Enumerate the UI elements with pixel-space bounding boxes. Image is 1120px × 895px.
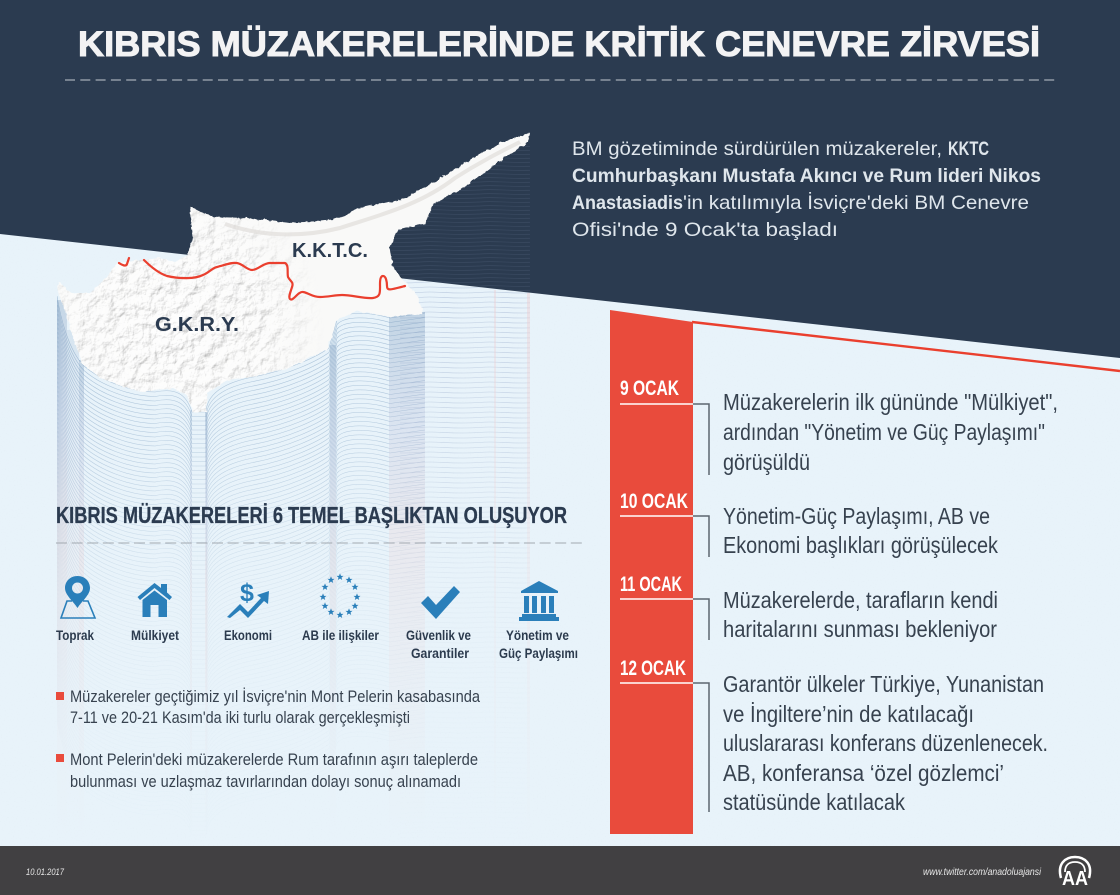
label: Guvenlik ve Garantiler: [406, 627, 471, 661]
icon: AA logo: [1060, 857, 1090, 890]
icon: Yonetim government building: [519, 581, 559, 621]
10 Ocak entry: 10 OCAK: [620, 490, 688, 513]
intro text block: Ofisi'nde 9 Ocak'ta başladı: [572, 219, 838, 241]
green line border: [119, 258, 405, 300]
icon: Guvenlik check mark: [421, 586, 460, 619]
bullet marker 1: [56, 692, 64, 700]
icon: Ekonomi dollar and arrow: $: [240, 579, 254, 607]
red slanted rule: [692, 322, 1120, 371]
bullet notes: bulunması ve uzlaşmaz tavırlarından dolayı sonuç alınamadı: [70, 772, 461, 791]
11 Ocak entry: [620, 573, 998, 642]
dark wave texture under Karpas: [390, 140, 530, 295]
label: Yonetim ve Guc Paylasimi: [499, 627, 578, 661]
section dashed rule: [56, 542, 585, 544]
title: KIBRIS MÜZAKERELERİNDE KRİTİK CENEVRE ZİRVESİ: [78, 25, 1040, 64]
bullet notes: Müzakereler geçtiğimiz yıl İsviçre'nin Mont Pelerin kasabasında: [70, 687, 480, 706]
footer url: www.twitter.com/anadoluajansi: [923, 867, 1042, 878]
12 Ocak entry: Garantör ülkeler Türkiye, Yunanistan: [723, 671, 1044, 697]
label: Mülkiyet: Mülkiyet: [131, 627, 179, 643]
northern mountain ridge: [225, 142, 520, 234]
label: KKTC: K.K.T.C.: [292, 240, 368, 262]
red date bar: [610, 310, 693, 834]
icon: Toprak map pin: [61, 576, 95, 618]
label: Guvenlik ve Garantiler: Garantiler: [411, 645, 469, 661]
wave line relief under the island: [57, 282, 530, 663]
title dashed rule: [65, 79, 1056, 81]
intro text block: Cumhurbaşkanı Mustafa Akıncı ve Rum lideri Nikos: [572, 165, 1041, 187]
label: Yonetim ve Guc Paylasimi: Yönetim ve: [506, 627, 569, 643]
map of Cyprus: [57, 133, 529, 412]
island landmass: [57, 133, 529, 412]
12 Ocak entry: AB, konferansa ‘özel gözlemci’: [723, 760, 1004, 786]
10 Ocak entry: [620, 490, 998, 558]
intro text block: [572, 138, 1041, 241]
footer: [0, 846, 1120, 895]
12 Ocak entry: 12 OCAK: [620, 657, 686, 680]
icon: Mülkiyet house: [138, 583, 172, 617]
dark slanted header panel: [0, 0, 1120, 358]
label: GKRY: G.K.R.Y.: [155, 314, 239, 336]
12 Ocak entry: [620, 657, 1048, 815]
footer date: 10.01.2017: [26, 867, 65, 878]
intro text block: 'in katılımıyla İsviçre'deki BM Cenevre: [683, 191, 1029, 214]
vertical colour strips: [57, 290, 530, 840]
9 Ocak entry: [620, 377, 1058, 475]
shaded relief: [58, 207, 308, 412]
label: Yonetim ve Guc Paylasimi: Güç Paylaşımı: [499, 645, 578, 661]
9 Ocak entry: 9 OCAK: [620, 377, 679, 400]
11 Ocak entry: Müzakerelerde, tarafların kendi: [723, 587, 998, 613]
bullet notes: 7-11 ve 20-21 Kasım'da iki turlu olarak gerçekleşmişti: [70, 708, 410, 727]
bullet marker 2: [56, 754, 64, 762]
bullet notes: [56, 687, 480, 791]
label: Ekonomi: Ekonomi: [224, 627, 272, 643]
9 Ocak entry: görüşüldü: [723, 449, 810, 475]
timeline panel: [610, 310, 1120, 834]
12 Ocak entry: statüsünde katılacak: [723, 789, 905, 815]
11 Ocak entry: 11 OCAK: [620, 573, 682, 596]
paper speckle: [0, 230, 1120, 850]
label: AB: AB ile ilişkiler: [302, 627, 379, 643]
section heading: KIBRIS MÜZAKERELERİ 6 TEMEL BAŞLIKTAN OLUŞUYOR: [56, 502, 567, 528]
icon: Ekonomi dollar and arrow: [227, 579, 269, 618]
intro text block: Anastasiadis: [572, 192, 683, 214]
icon: AA logo: AA: [1062, 868, 1088, 890]
9 Ocak entry: Müzakerelerin ilk gününde "Mülkiyet",: [723, 389, 1058, 415]
11 Ocak entry: haritalarını sunması bekleniyor: [723, 616, 997, 642]
12 Ocak entry: uluslararası konferans düzenlenecek.: [723, 730, 1048, 756]
10 Ocak entry: Yönetim-Güç Paylaşımı, AB ve: [723, 503, 990, 529]
10 Ocak entry: Ekonomi başlıkları görüşülecek: [723, 532, 998, 558]
label: Guvenlik ve Garantiler: Güvenlik ve: [406, 627, 471, 643]
icon: EU stars: [320, 573, 360, 618]
bullet notes: Mont Pelerin'deki müzakerelerde Rum tarafının aşırı taleplerde: [70, 750, 478, 769]
label: Toprak: Toprak: [56, 627, 94, 643]
intro text block: KKTC: [948, 138, 989, 160]
9 Ocak entry: ardından "Yönetim ve Güç Paylaşımı": [723, 419, 1045, 445]
icon row: [56, 573, 578, 661]
12 Ocak entry: ve İngiltere’nin de katılacağı: [723, 701, 974, 727]
intro text block: BM gözetiminde sürdürülen müzakereler,: [572, 138, 942, 160]
